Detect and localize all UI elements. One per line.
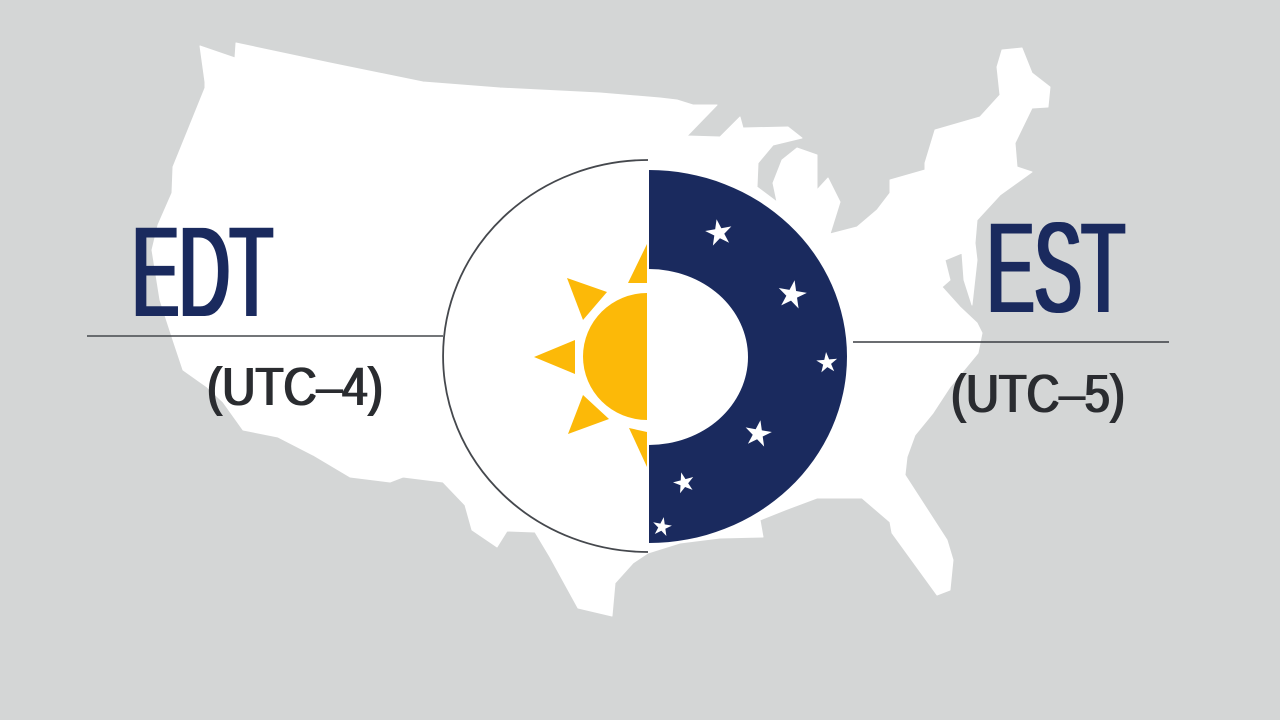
- rule under EST: [853, 341, 1169, 343]
- icon: stars: [651, 217, 838, 537]
- sublabel: UTC-4: (UTC–4): [207, 357, 383, 417]
- icon: sun: [534, 244, 647, 467]
- heading: EDT: EDT: [132, 201, 273, 344]
- map: contiguous United States silhouette: [152, 43, 1050, 616]
- label group: EST: [853, 197, 1169, 424]
- sublabel: UTC-5: (UTC–5): [951, 364, 1125, 424]
- rule under EDT: [87, 335, 443, 337]
- sun disc: [583, 293, 647, 420]
- heading: EST: EST: [987, 197, 1125, 340]
- circle outline: left half: [443, 160, 648, 552]
- night half with crescent: [649, 170, 847, 543]
- sun rays: [534, 244, 647, 467]
- label group: EDT: [87, 201, 443, 417]
